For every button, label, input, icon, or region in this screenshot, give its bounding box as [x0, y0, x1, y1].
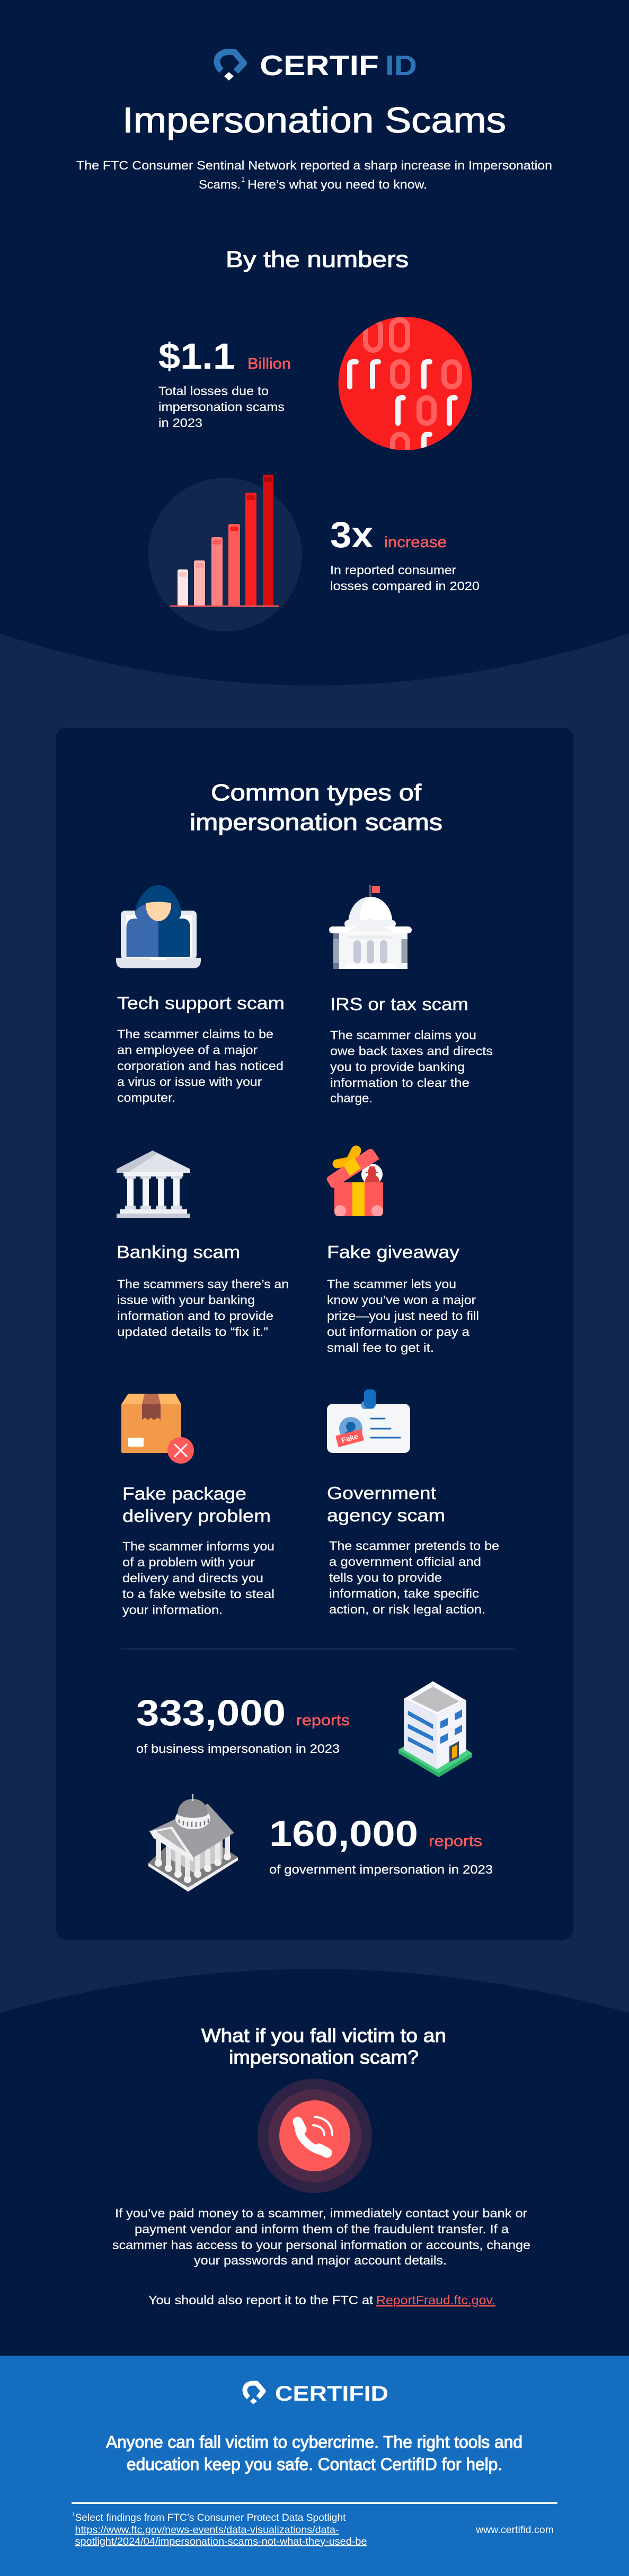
text: footnote source: 1 — [72, 2512, 75, 2518]
icon: government building — [148, 1794, 238, 1892]
heading: what if you fall victim: impersonation scam? — [229, 2046, 419, 2068]
stat: 3x increase: In reported consumer — [330, 563, 456, 577]
stat: $1.1 billion: $1.1 — [158, 336, 235, 377]
stat: 333,000 reports: reports — [296, 1712, 350, 1729]
text: fake package delivery problem: to a fake website to steal — [122, 1587, 274, 1601]
text: fake giveaway: The scammer lets you — [327, 1277, 456, 1291]
stat: 160,000 reports: reports — [429, 1833, 482, 1850]
text: fake package delivery problem: your information. — [122, 1603, 223, 1617]
title: Impersonation Scams — [122, 100, 506, 140]
icon: bank — [117, 1151, 190, 1218]
icon: gift box with scammer — [327, 1149, 383, 1217]
text: banking scam: updated details to “fix it.” — [117, 1325, 268, 1339]
text: footnote source — [72, 2512, 367, 2547]
text: website: www.certifid.com — [475, 2524, 554, 2536]
text: what to do: your passwords and major account details. — [194, 2253, 447, 2267]
text: fake giveaway — [327, 1242, 479, 1354]
text: irs or tax scam: The scammer claims you — [330, 1028, 476, 1042]
text: irs or tax scam: IRS or tax scam — [330, 994, 468, 1014]
icon: package with error mark — [121, 1394, 194, 1464]
text: government agency scam: tells you to provide — [329, 1571, 442, 1584]
text: banking scam: The scammers say there’s an — [117, 1277, 289, 1291]
text: irs or tax scam — [330, 994, 493, 1105]
intro text: Scams. — [199, 177, 241, 191]
logo: CertifID header — [217, 50, 417, 82]
text: what to do: payment vendor and inform them of the fraudulent transfer. If a — [135, 2222, 509, 2236]
icon: hacker in laptop — [116, 885, 201, 968]
panel: footer — [0, 2356, 629, 2576]
text: banking scam: information and to provide — [117, 1309, 273, 1323]
text: tech support scam: computer. — [117, 1091, 175, 1104]
text: government agency scam: agency scam — [327, 1505, 445, 1525]
logo: CertifID header: CERTIF — [260, 50, 379, 82]
heading: by the numbers: By the numbers — [226, 247, 409, 272]
stat: 333,000 reports: of business impersonation in 2023 — [136, 1742, 340, 1755]
text: banking scam — [117, 1242, 289, 1339]
heading: common types — [190, 780, 442, 835]
text: fake package delivery problem: The scammer informs you — [122, 1539, 274, 1553]
text: irs or tax scam: information to clear the — [330, 1076, 469, 1090]
heading: what if you fall victim: What if you fall victim to an — [201, 2025, 446, 2046]
stat: 160,000 reports — [269, 1813, 493, 1876]
text: footnote source: Select findings from FTC’s Consumer Protect Data Spotlight — [75, 2512, 346, 2524]
text: irs or tax scam: charge. — [330, 1091, 373, 1105]
text: report to the FTC: You should also report it to the FTC at — [148, 2293, 374, 2307]
text: government agency scam: Government — [327, 1483, 436, 1503]
logo: footer CertifID: CERTIFID — [275, 2382, 388, 2405]
icon: fake ID badge — [327, 1389, 410, 1453]
text: what to do: If you’ve paid money to a scammer, immediately contact your bank or — [115, 2206, 527, 2220]
text: tech support scam: The scammer claims to be — [117, 1027, 273, 1041]
text: call to action: Anyone can fall victim to cybercrime. The right tools and — [106, 2432, 522, 2452]
text: government agency scam: information, take specific — [329, 1586, 479, 1600]
text: irs or tax scam: owe back taxes and directs — [330, 1044, 493, 1058]
text: tech support scam: corporation and has noticed — [117, 1059, 284, 1073]
stat: 160,000 reports: 160,000 — [269, 1813, 418, 1854]
stat: 333,000 reports — [136, 1692, 350, 1755]
stat: 333,000 reports: 333,000 — [136, 1692, 286, 1733]
heading: what if you fall victim — [201, 2025, 446, 2068]
text: report to the FTC: ReportFraud.ftc.gov. — [376, 2293, 495, 2307]
text: tech support scam: a virus or issue with your — [117, 1075, 262, 1089]
text: tech support scam — [117, 993, 285, 1104]
logo: CertifID header: ID — [385, 50, 417, 82]
text: what to do — [112, 2206, 530, 2267]
text: fake package delivery problem: of a problem with your — [122, 1555, 255, 1569]
text: fake giveaway: small fee to get it. — [327, 1341, 434, 1354]
text: banking scam: issue with your banking — [117, 1293, 255, 1307]
text: call to action — [106, 2432, 522, 2474]
text: fake giveaway: out information or pay a — [327, 1325, 469, 1339]
text: government agency scam: action, or risk legal action. — [329, 1602, 485, 1616]
stat: $1.1 billion: in 2023 — [158, 416, 202, 430]
stat: 160,000 reports: of government impersonation in 2023 — [269, 1862, 493, 1876]
text: report to the FTC — [148, 2293, 495, 2307]
logo: footer CertifID — [245, 2382, 388, 2405]
icon: capitol building with flag — [329, 885, 412, 969]
text: fake package delivery problem: delivery and directs you — [122, 1571, 263, 1585]
stat: 3x increase: 3x — [330, 514, 373, 555]
intro text: The FTC Consumer Sentinal Network reported a sharp increase in Impersonation — [76, 158, 552, 172]
heading: common types: Common types of — [211, 780, 422, 806]
text: fake giveaway: prize—you just need to fill — [327, 1309, 479, 1323]
icon: fake ID badge: Fake — [341, 1432, 359, 1445]
stat: 3x increase: increase — [384, 534, 447, 551]
text: call to action: education keep you safe. Contact CertifID for help. — [127, 2455, 502, 2474]
text: fake giveaway: know you’ve won a major — [327, 1293, 476, 1307]
text: government agency scam: The scammer pretends to be — [329, 1539, 499, 1553]
bar chart: rising losses — [148, 475, 302, 631]
stat: 3x increase — [330, 514, 480, 593]
icon: red circle with binary digits — [338, 317, 472, 460]
intro text: 1 — [241, 175, 245, 183]
text: footnote source: https://www.ftc.gov/news-events/data-visualizations/data- — [75, 2524, 339, 2536]
stat: $1.1 billion — [158, 336, 291, 430]
icon: phone call with rings — [258, 2079, 372, 2193]
text: tech support scam: Tech support scam — [117, 993, 285, 1013]
icon: office building — [398, 1681, 472, 1777]
stat: $1.1 billion: impersonation scams — [158, 400, 285, 414]
text: fake giveaway: Fake giveaway — [327, 1242, 460, 1262]
text: tech support scam: an employee of a major — [117, 1043, 258, 1057]
text: fake package delivery problem: Fake package — [122, 1484, 246, 1503]
panel: common types of impersonation scams — [56, 728, 573, 1940]
intro text — [76, 158, 552, 191]
text: irs or tax scam: you to provide banking — [330, 1060, 465, 1074]
text: fake package delivery problem — [122, 1484, 274, 1617]
text: fake package delivery problem: delivery problem — [122, 1506, 271, 1526]
text: what to do: scammer has access to your personal information or accounts, change — [112, 2238, 530, 2252]
stat: $1.1 billion: Billion — [247, 355, 291, 372]
text: footnote source: spotlight/2024/04/impersonation-scams-not-what-they-used-be — [75, 2536, 367, 2547]
stat: $1.1 billion: Total losses due to — [158, 384, 269, 398]
intro text: Here’s what you need to know. — [247, 177, 427, 191]
stat: 3x increase: losses compared in 2020 — [330, 579, 480, 593]
text: government agency scam: a government official and — [329, 1555, 481, 1568]
heading: common types: impersonation scams — [190, 809, 442, 835]
text: banking scam: Banking scam — [117, 1242, 240, 1262]
text: government agency scam — [327, 1483, 499, 1616]
